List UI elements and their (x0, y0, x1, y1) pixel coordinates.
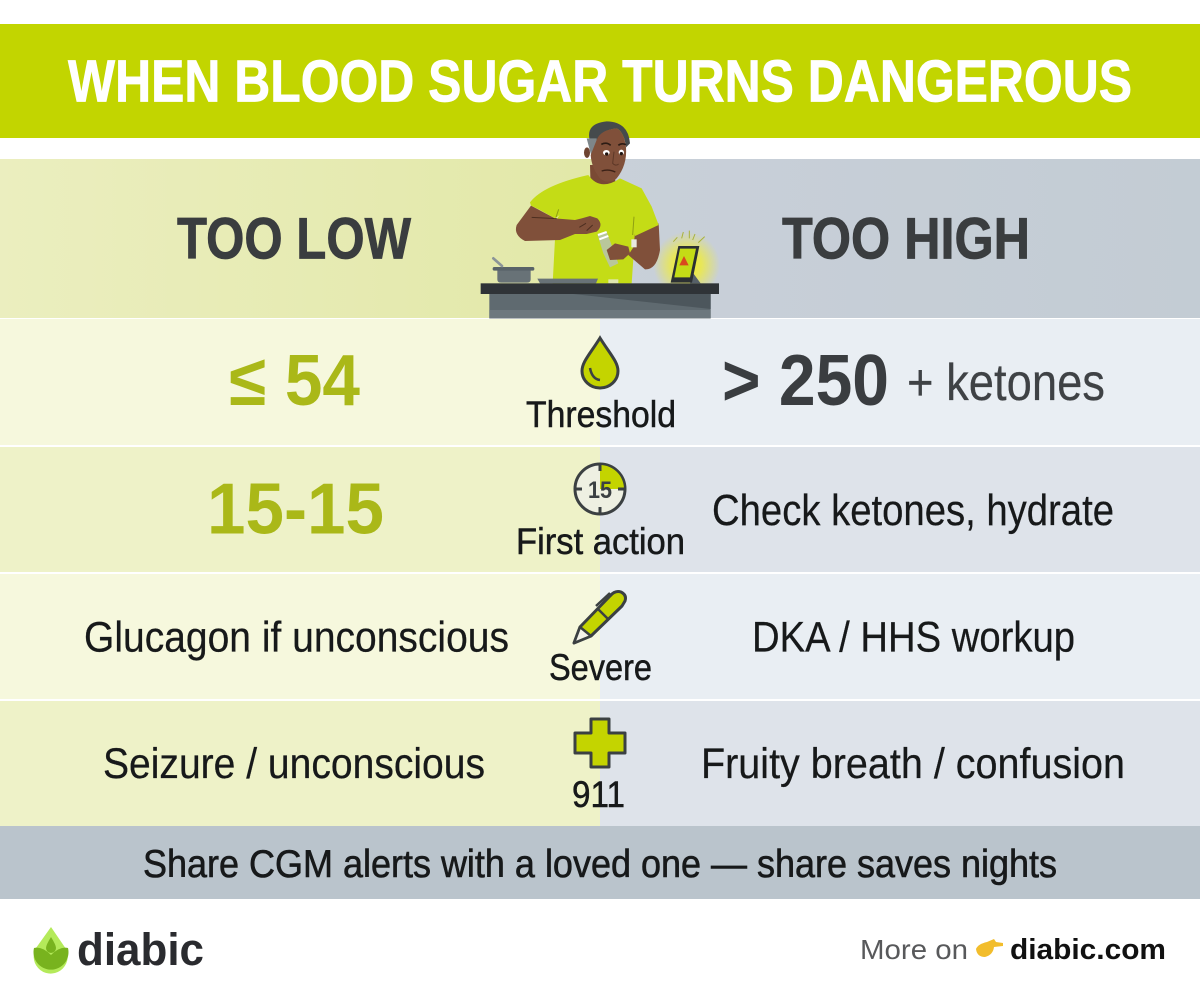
value: 15-15: 15-15 (207, 470, 384, 550)
text: more on: More on (860, 934, 968, 965)
label: first action: First action (516, 521, 685, 562)
footer tip band (0, 826, 1200, 899)
text: seizure / unconscious: Seizure / unconscious (103, 740, 485, 788)
icon: drop (582, 338, 618, 388)
icon: pen (574, 592, 626, 643)
panel: too low header (0, 159, 600, 318)
icon: logo drop (34, 927, 68, 974)
label: threshold: Threshold (526, 394, 676, 435)
link: more on diabic.com (860, 934, 1166, 966)
icon: timer: 15 (588, 477, 612, 504)
label: severe: Severe (549, 647, 652, 688)
row: severe (0, 574, 1200, 699)
text: dka / hhs workup: DKA / HHS workup (752, 614, 1075, 662)
row: first action (0, 447, 1200, 572)
text: fruity breath / confusion: Fruity breath / confusion (701, 740, 1125, 788)
heading: too low: TOO LOW (177, 206, 411, 272)
panel: too high header (600, 159, 1200, 318)
text: check ketones, hydrate: Check ketones, hydrate (712, 486, 1114, 535)
illustration: man checking glucose at kitchen counter (481, 121, 720, 318)
value: at or below 54: ≤ 54 (229, 341, 360, 421)
logo: diabic (34, 924, 204, 975)
row: 911 (0, 701, 1200, 826)
tip text: Share CGM alerts with a loved one — share saves nights (143, 843, 1057, 886)
text: glucagon if unconscious: Glucagon if unconscious (84, 614, 509, 662)
value: above 250: > 250 (722, 341, 889, 421)
value: plus ketones: + ketones (907, 354, 1105, 412)
heading: too high: TOO HIGH (782, 206, 1030, 272)
icon: timer (575, 464, 625, 514)
label: 911: 911 (572, 774, 625, 815)
text: diabic.com: diabic.com (1010, 934, 1166, 966)
title banner (0, 24, 1200, 138)
row: threshold (0, 319, 1200, 445)
wordmark: diabic (77, 924, 204, 975)
icon: pointing hand (976, 939, 1003, 957)
icon: medical cross (575, 719, 625, 767)
